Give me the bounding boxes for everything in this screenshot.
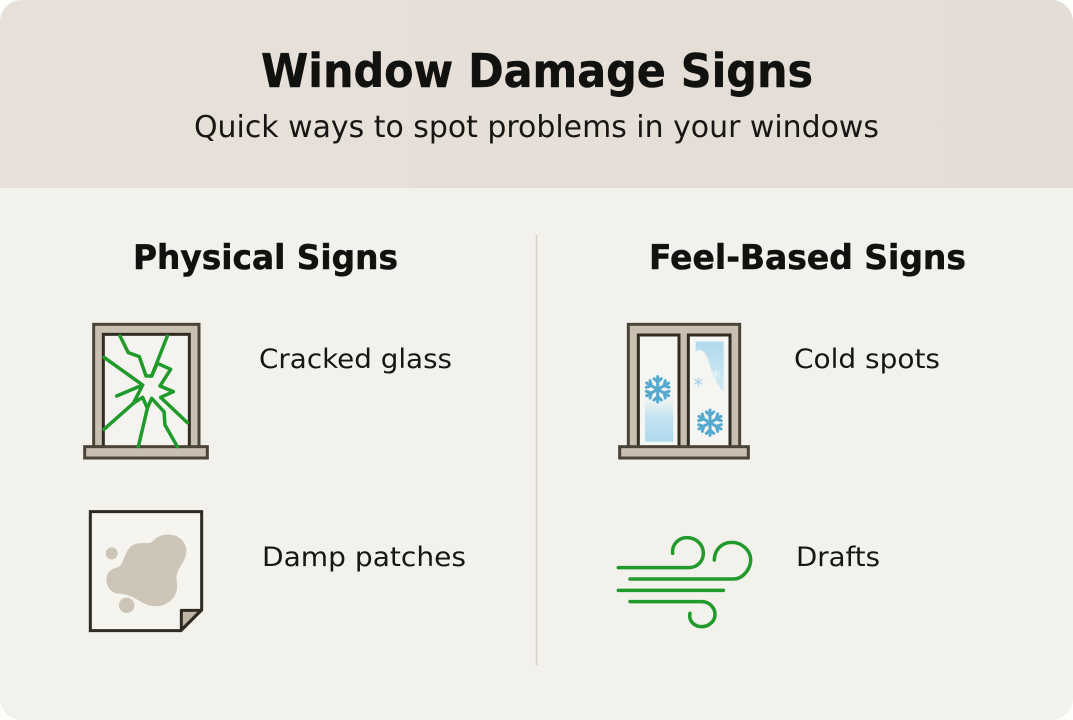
title: Window Damage Signs	[261, 44, 813, 98]
column divider	[536, 235, 538, 665]
label: Damp patches: Damp patches	[262, 542, 466, 573]
icon: cracked window	[85, 324, 207, 458]
label: Cold spots: Cold spots	[794, 344, 940, 375]
heading: Feel-Based Signs: Feel-Based Signs	[649, 238, 966, 278]
icon: wind drafts	[618, 538, 751, 627]
label: Drafts: Drafts	[796, 542, 880, 573]
subtitle: Quick ways to spot problems in your windows	[194, 110, 879, 145]
header band	[0, 0, 1073, 188]
label: Cracked glass: Cracked glass	[259, 344, 452, 375]
icon: frosted window	[620, 324, 748, 458]
heading: Physical Signs: Physical Signs	[133, 238, 398, 278]
icon: damp patch on paper	[90, 512, 202, 631]
